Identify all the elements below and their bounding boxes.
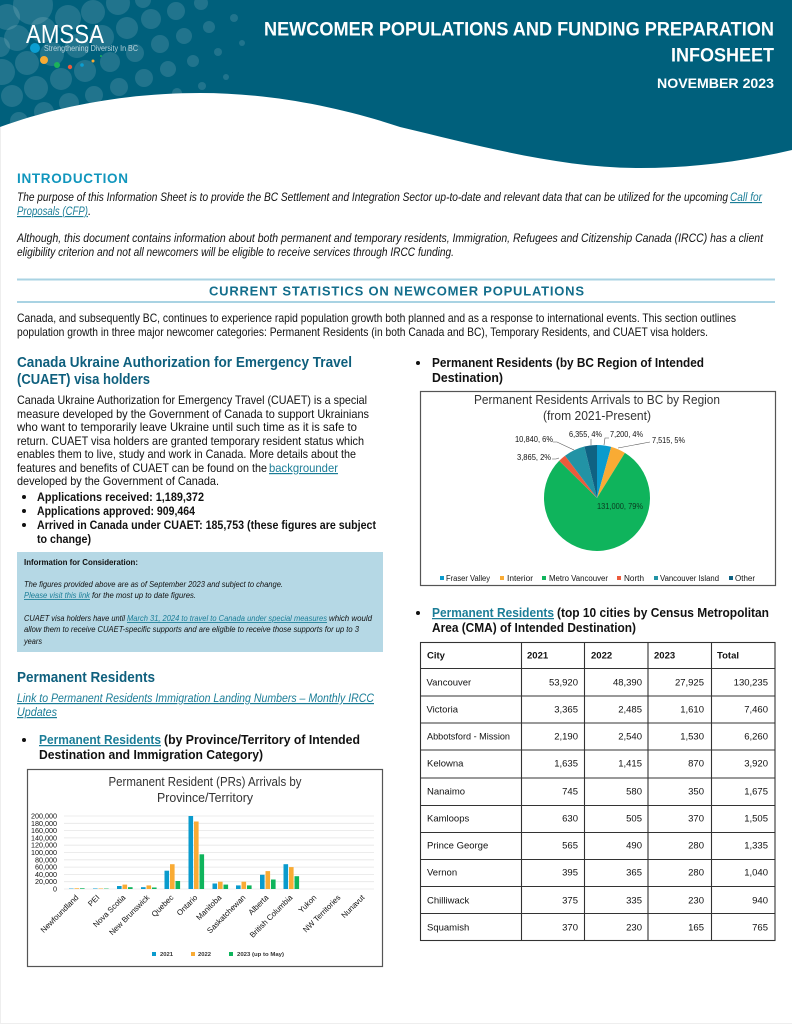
- bullet heading: PRs by BC region: Destination): [432, 371, 503, 385]
- bar chart: PR arrivals by province: Nova Scotia: [91, 893, 128, 929]
- CUAET description: who want to temporarily leave Ukraine until such time as it is safe to: [16, 420, 357, 434]
- table: top 10 cities: Total: [717, 650, 739, 662]
- callout: information for consideration: Information for Consideration:: [24, 557, 138, 567]
- pie chart: PR arrivals to BC by region: Other: [735, 574, 755, 583]
- bullet heading: PRs by province: Destination and Immigration Category): [39, 748, 263, 762]
- CUAET description: developed by the Government of Canada.: [17, 474, 219, 488]
- table: top 10 cities: 505: [626, 814, 642, 824]
- pie chart: PR arrivals to BC by region: Vancouver Island: [660, 574, 719, 583]
- table: top 10 cities: City: [427, 650, 446, 662]
- CUAET description: backgrounder: [269, 461, 338, 475]
- table: top 10 cities: 350: [688, 786, 704, 798]
- heading: permanent residents: Permanent Residents: [17, 670, 155, 686]
- pie chart: PR arrivals to BC by region: 7,200, 4%: [610, 429, 643, 439]
- table: top 10 cities: 565: [562, 840, 578, 852]
- bar chart: PR arrivals by province: Ontario: [175, 893, 200, 918]
- table: top 10 cities: 1,335: [744, 840, 768, 852]
- bullet heading: top 10 cities: [416, 606, 769, 635]
- table: top 10 cities: 870: [688, 758, 704, 770]
- callout: information for consideration: The figures provided above are as of September 2023 and subject to change.: [24, 579, 283, 589]
- bar chart: PR arrivals by province: 200,000: [31, 812, 57, 820]
- bar chart: PR arrivals by province: Alberta: [247, 893, 271, 917]
- table: top 10 cities: 335: [626, 896, 642, 906]
- callout: information for consideration: Please visit this link: [24, 590, 91, 600]
- heading: CUAET: [17, 355, 352, 388]
- heading: introduction: INTRODUCTION: [17, 171, 128, 186]
- bar chart: PR arrivals by province: Newfoundland: [39, 893, 80, 935]
- table: top 10 cities: 230: [688, 896, 704, 906]
- table: top 10 cities: 165: [688, 922, 704, 934]
- bullet heading: PRs by BC region: [416, 356, 704, 385]
- pie chart: PR arrivals to BC by region: 131,000, 79%: [597, 501, 643, 511]
- CUAET description: enables them to live, study and work in Canada. More details about the: [17, 447, 356, 461]
- table: top 10 cities: Squamish: [427, 922, 469, 934]
- callout: information for consideration: which would: [329, 613, 372, 623]
- table: top 10 cities: 1,040: [744, 868, 768, 878]
- pie chart: PR arrivals to BC by region: [420, 392, 776, 586]
- bar chart: PR arrivals by province: 2023 (up to May): [237, 952, 284, 958]
- CUAET description: Canada Ukraine Authorization for Emergency Travel (CUAET) is a special: [17, 393, 367, 407]
- table: top 10 cities: 6,260: [744, 732, 768, 742]
- bullet heading: PRs by BC region: Permanent Residents (by BC Region of Intended: [432, 356, 704, 370]
- link: landing numbers: Link to Permanent Residents Immigration Landing Numbers – Monthly IRCC: [17, 691, 374, 705]
- table: top 10 cities: Victoria: [426, 704, 459, 716]
- statistics intro text: [17, 311, 736, 339]
- bar chart: PR arrivals by province: [28, 770, 382, 966]
- table: top 10 cities: 2,190: [554, 732, 578, 742]
- table: top 10 cities: 745: [562, 786, 578, 798]
- bullet heading: PRs by province: (by Province/Territory of Intended: [164, 733, 360, 747]
- callout: information for consideration: March 31, 2024 to travel to Canada under special measures: [127, 613, 328, 623]
- callout: information for consideration: for the most up to date figures.: [92, 590, 196, 600]
- CUAET description: features and benefits of CUAET can be found on the: [17, 461, 267, 475]
- logo: AMSSA: Strengthening Diversity In BC: [44, 43, 138, 53]
- callout: information for consideration: [17, 552, 383, 652]
- table: top 10 cities: Vancouver: [426, 678, 471, 688]
- table: top 10 cities: 48,390: [613, 678, 642, 688]
- bar chart: PR arrivals by province: Quebec: [150, 893, 175, 919]
- table: top 10 cities: 3,365: [554, 704, 578, 716]
- link: landing numbers: [17, 691, 374, 719]
- bar chart: PR arrivals by province: Yukon: [297, 893, 318, 915]
- table: top 10 cities: 3,920: [744, 758, 768, 770]
- table: top 10 cities: 1,415: [618, 758, 642, 770]
- callout: information for consideration: allow them to receive CUAET-specific supports and are eligible to receive those supports for up to 3: [24, 624, 359, 634]
- pie chart: PR arrivals to BC by region: 3,865, 2%: [517, 452, 551, 462]
- introduction text: Call for: [730, 192, 763, 204]
- title: [264, 20, 774, 66]
- bullet heading: PRs by province: Permanent Residents: [39, 733, 161, 747]
- bar chart: PR arrivals by province: 2021: [160, 952, 173, 958]
- table: top 10 cities: Prince George: [427, 840, 488, 852]
- pie chart: PR arrivals to BC by region: (from 2021-Present): [543, 408, 651, 423]
- bullet heading: PRs by province: [22, 733, 360, 762]
- title: INFOSHEET: [671, 46, 774, 66]
- CUAET figures list: Applications received: 1,189,372: [37, 490, 204, 504]
- CUAET figures list: Arrived in Canada under CUAET: 185,753 (these figures are subject: [37, 518, 376, 532]
- table: top 10 cities: Abbotsford - Mission: [427, 732, 510, 742]
- table: top 10 cities: 1,675: [744, 786, 768, 798]
- table: top 10 cities: 765: [752, 922, 768, 934]
- table: top 10 cities: 230: [626, 922, 642, 934]
- table: top 10 cities: 2023: [654, 650, 675, 662]
- pie chart: PR arrivals to BC by region: 10,840, 6%: [515, 434, 553, 444]
- bar chart: PR arrivals by province: 60,000: [35, 863, 57, 872]
- introduction text: eligibility criterion and not all newcomers will be eligible to receive services through IRCC funding.: [17, 247, 454, 259]
- bar chart: PR arrivals by province: 120,000: [31, 841, 57, 850]
- bar chart: PR arrivals by province: Nunavut: [340, 892, 367, 920]
- table: top 10 cities: 1,635: [554, 758, 578, 770]
- bullet heading: top 10 cities: Area (CMA) of Intended Destination): [432, 621, 636, 635]
- CUAET description: return. CUAET visa holders are granted temporary resident status which: [17, 434, 364, 448]
- introduction text: Proposals (CFP): [17, 206, 88, 218]
- table: top 10 cities: Nanaimo: [427, 786, 465, 798]
- bar chart: PR arrivals by province: 100,000: [31, 848, 57, 857]
- title: NEWCOMER POPULATIONS AND FUNDING PREPARATION: [264, 20, 774, 40]
- bar chart: PR arrivals by province: 140,000: [31, 833, 57, 842]
- table: top 10 cities: 2,485: [618, 704, 642, 716]
- table: top 10 cities: 130,235: [734, 678, 768, 688]
- CUAET description: measure developed by the Government of Canada to support Ukrainians: [17, 407, 369, 421]
- bullet heading: top 10 cities: (top 10 cities by Census Metropolitan: [557, 606, 769, 620]
- CUAET figures list: to change): [37, 532, 91, 546]
- link: landing numbers: Updates: [17, 705, 57, 719]
- table: top 10 cities: 280: [688, 840, 704, 852]
- table: top 10 cities: 27,925: [675, 678, 704, 688]
- bar chart: PR arrivals by province: Permanent Resident (PRs) Arrivals by: [108, 774, 302, 789]
- date: NOVEMBER 2023: [657, 75, 774, 91]
- CUAET figures list: [22, 490, 376, 546]
- table: top 10 cities: 365: [626, 868, 642, 878]
- table: top 10 cities: Kamloops: [427, 814, 469, 824]
- bar chart: PR arrivals by province: PEI: [86, 893, 101, 908]
- bar chart: PR arrivals by province: 80,000: [35, 855, 57, 864]
- table: top 10 cities: Chilliwack: [427, 896, 469, 906]
- table: top 10 cities: 1,610: [680, 704, 704, 716]
- table: top 10 cities: 630: [562, 814, 578, 824]
- table: top 10 cities: 280: [688, 868, 704, 878]
- heading: CUAET: (CUAET) visa holders: [17, 372, 150, 388]
- pie chart: PR arrivals to BC by region: 6,355, 4%: [569, 429, 602, 439]
- pie chart: PR arrivals to BC by region: North: [624, 574, 644, 583]
- bar chart: PR arrivals by province: New Brunswick: [107, 893, 151, 937]
- table: top 10 cities: Kelowna: [427, 758, 464, 770]
- table: top 10 cities: 2022: [591, 650, 612, 662]
- CUAET description: [16, 393, 369, 488]
- header banner: [0, 0, 792, 168]
- bar chart: PR arrivals by province: 0: [53, 884, 57, 894]
- bar chart: PR arrivals by province: Saskatchewan: [205, 893, 247, 935]
- logo: AMSSA: [26, 19, 138, 69]
- table: top 10 cities: 7,460: [744, 704, 768, 716]
- bar chart: PR arrivals by province: British Columbia: [248, 893, 295, 940]
- table: top 10 cities: 395: [562, 868, 578, 878]
- heading: CUAET: Canada Ukraine Authorization for Emergency Travel: [17, 355, 352, 371]
- bar chart: PR arrivals by province: 180,000: [31, 819, 57, 828]
- introduction text: .: [88, 206, 91, 218]
- bar chart: PR arrivals by province: Manitoba: [194, 893, 224, 922]
- callout: information for consideration: CUAET visa holders have until: [24, 613, 126, 623]
- table: top 10 cities: 1,505: [744, 814, 768, 824]
- table: top 10 cities: 580: [626, 786, 642, 798]
- table: top 10 cities: 490: [626, 840, 642, 852]
- table: top 10 cities: Vernon: [427, 868, 457, 878]
- table: top 10 cities: 53,920: [549, 678, 578, 688]
- introduction text: [16, 192, 764, 259]
- bar chart: PR arrivals by province: NW Territories: [301, 893, 342, 934]
- callout: information for consideration: years: [23, 636, 43, 646]
- pie chart: PR arrivals to BC by region: 7,515, 5%: [652, 435, 685, 445]
- table: top 10 cities: 2021: [527, 650, 549, 662]
- logo: AMSSA: AMSSA: [26, 19, 105, 49]
- table: top 10 cities: 1,530: [680, 732, 704, 742]
- table: top 10 cities: 370: [688, 814, 704, 824]
- bar chart: PR arrivals by province: 2022: [198, 952, 211, 958]
- table: top 10 cities: 940: [752, 896, 768, 906]
- bar chart: PR arrivals by province: 160,000: [31, 826, 57, 835]
- bullet heading: top 10 cities: Permanent Residents: [432, 606, 554, 620]
- pie chart: PR arrivals to BC by region: Permanent Residents Arrivals to BC by Region: [474, 392, 720, 407]
- table: top 10 cities: 375: [562, 896, 578, 906]
- bar chart: PR arrivals by province: Province/Territory: [157, 790, 253, 805]
- pie chart: PR arrivals to BC by region: Fraser Valley: [446, 574, 490, 583]
- bar chart: PR arrivals by province: 20,000: [35, 877, 57, 886]
- table: top 10 cities: 2,540: [618, 732, 642, 742]
- table: top 10 cities: 370: [562, 922, 578, 934]
- table: top 10 cities: [420, 642, 775, 940]
- heading: current statistics: CURRENT STATISTICS ON NEWCOMER POPULATIONS: [209, 284, 584, 298]
- pie chart: PR arrivals to BC by region: Interior: [507, 574, 533, 583]
- CUAET figures list: Applications approved: 909,464: [37, 504, 195, 518]
- bar chart: PR arrivals by province: 40,000: [35, 870, 57, 879]
- pie chart: PR arrivals to BC by region: Metro Vancouver: [549, 574, 608, 583]
